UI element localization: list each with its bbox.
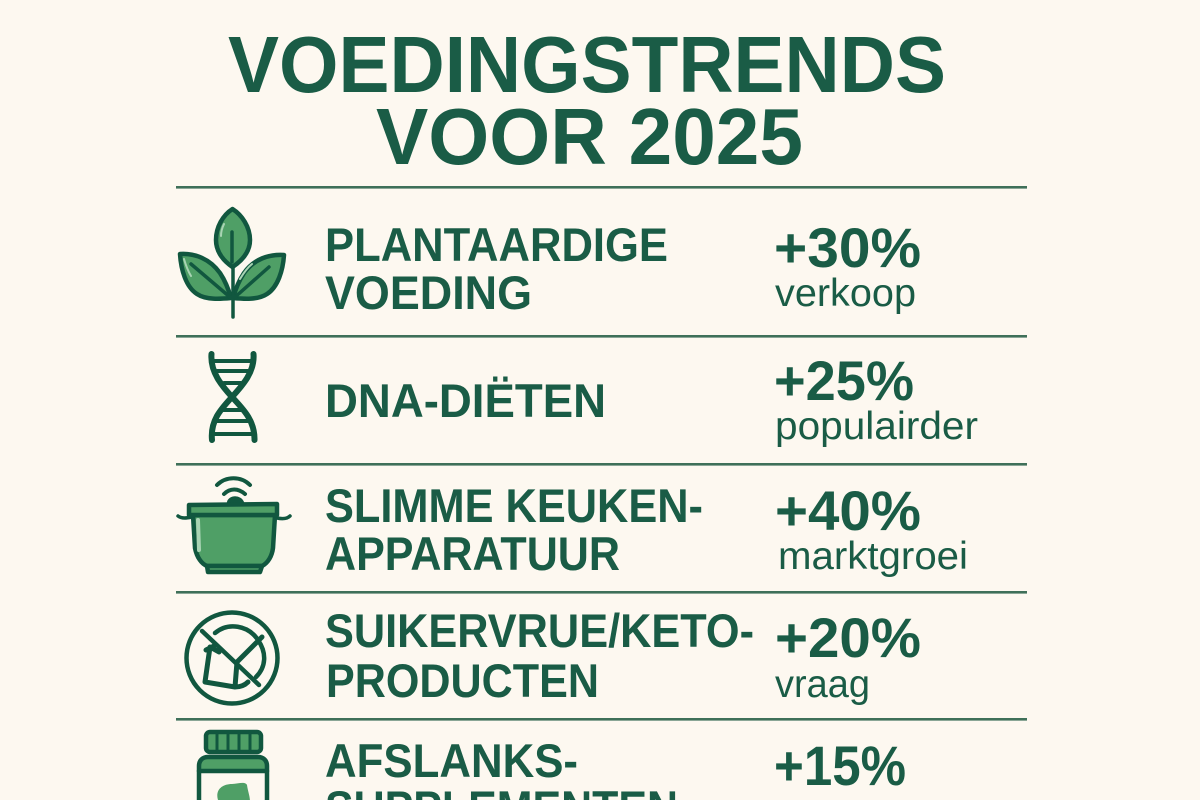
name: plantaardige voeding: PLANTAARDIGE [325, 218, 668, 271]
stat: +40% marktgroei [775, 479, 968, 578]
icon: plant leaves [180, 209, 284, 317]
stat: +40% marktgroei: +40% [775, 479, 921, 542]
panel: dna-diëten [211, 349, 978, 448]
stat: +30% verkoop [774, 216, 921, 315]
stat: +20% vraag: +20% [775, 606, 921, 669]
stat: +20% vraag [775, 606, 921, 706]
title: VOOR 2025 [376, 92, 803, 181]
name: slimme keukenapparatuur: APPARATUUR [325, 527, 620, 580]
stat: +25% populairder: +25% [774, 349, 914, 412]
panel: afslanksupplementen [199, 732, 906, 800]
icon: smart pot [178, 478, 290, 572]
stat: +15%: +15% [774, 734, 906, 797]
name: plantaardige voeding: VOEDING [325, 266, 532, 319]
name: dna-diëten: DNA-DIËTEN [325, 374, 606, 427]
name: afslanksupplementen [325, 734, 678, 800]
name: suikervrije/keto-producten: PRODUCTEN [326, 654, 599, 707]
name: suikervrije/keto-producten: SUIKERVRUE/KETO- [325, 604, 754, 657]
stat: +25% populairder [774, 349, 978, 448]
stat: +25% populairder: populairder [775, 405, 978, 448]
title: VOEDINGSTRENDS [228, 20, 946, 109]
icon: no sugar sign [186, 612, 278, 704]
name: slimme keukenapparatuur: SLIMME KEUKEN- [325, 479, 703, 532]
title [228, 20, 946, 181]
icon: dna helix [211, 354, 255, 440]
name: afslanksupplementen: AFSLANKS- [325, 734, 578, 787]
panel: slimme keukenapparatuur [178, 478, 968, 580]
stat: +30% verkoop: +30% [774, 216, 921, 279]
name: slimme keukenapparatuur [325, 479, 703, 580]
stat: +40% marktgroei: marktgroei [778, 535, 968, 578]
name: suikervrije/keto-producten [325, 604, 754, 707]
panel: suikervrije/keto-producten [186, 604, 921, 707]
stat: +20% vraag: vraag [775, 663, 870, 706]
icon: supplement bottle [199, 732, 267, 800]
name: plantaardige voeding [325, 218, 668, 319]
panel: plantaardige voeding [180, 209, 921, 319]
stat: +30% verkoop: verkoop [775, 272, 916, 315]
